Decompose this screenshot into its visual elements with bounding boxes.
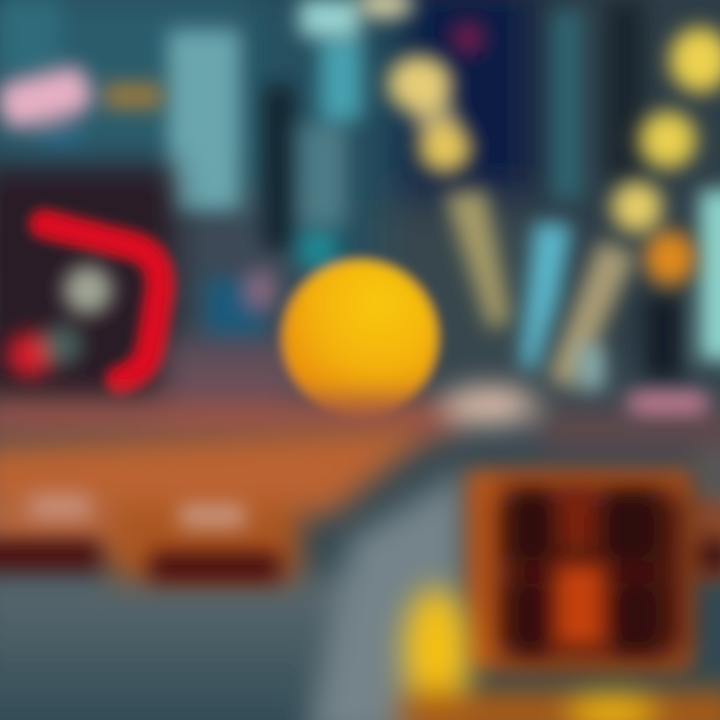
- golden glow at base of crate: [400, 588, 720, 720]
- street lights: [357, 0, 720, 390]
- yellow ball: [282, 260, 438, 416]
- orange crate: [466, 470, 720, 670]
- crate dark cells: [500, 490, 686, 658]
- dark band on counter: [0, 540, 280, 582]
- pale highlights on counter: [30, 495, 245, 527]
- dark sign panel: [0, 165, 295, 420]
- red neon arc: [44, 224, 160, 380]
- pink lights right: [628, 392, 708, 414]
- lower road: [0, 430, 720, 720]
- neon sign: pink and orange: [0, 64, 162, 147]
- upper background buildings: [0, 0, 720, 400]
- crate cell details: [510, 490, 720, 652]
- red dot and grey blob: [8, 266, 112, 377]
- orange counter band: [0, 425, 440, 580]
- cyan light streak: [520, 222, 604, 390]
- horizon glow: [0, 387, 720, 450]
- building columns: [0, 0, 720, 380]
